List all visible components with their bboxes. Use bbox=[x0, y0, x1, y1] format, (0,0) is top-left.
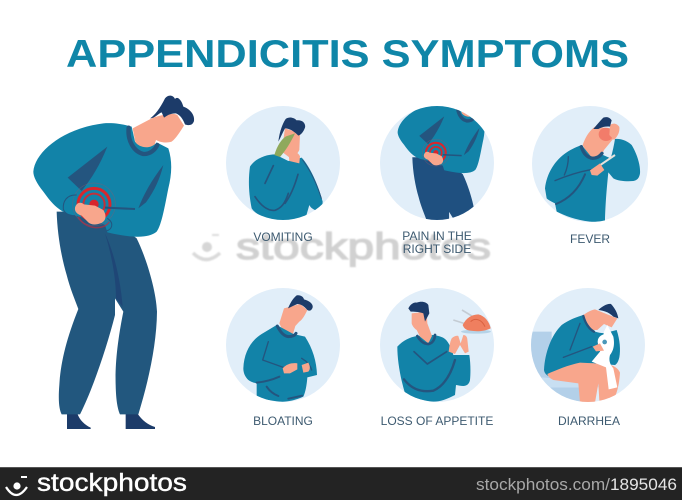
forehead hand bbox=[609, 124, 619, 140]
sweater bbox=[243, 325, 317, 402]
icon: loss of appetite bbox=[380, 288, 494, 402]
trousers bbox=[412, 157, 474, 220]
toilet paper bbox=[592, 325, 617, 389]
hand with thermometer bbox=[590, 163, 604, 176]
watermark bbox=[193, 226, 491, 267]
sweater folds bbox=[68, 147, 107, 191]
head bbox=[583, 309, 617, 330]
main figure: man holding his abdomen bbox=[33, 96, 194, 429]
hair bbox=[598, 304, 618, 318]
hair bbox=[408, 302, 429, 322]
icon: bloating bbox=[226, 288, 340, 402]
collar bbox=[583, 316, 594, 332]
watermark: stockphotos bbox=[236, 226, 491, 267]
head and neck bbox=[583, 127, 615, 159]
folds bbox=[555, 157, 591, 181]
collar bbox=[581, 147, 602, 158]
collar bbox=[128, 128, 157, 154]
turkey bbox=[463, 314, 491, 331]
collar bbox=[417, 335, 435, 344]
vomit bbox=[274, 133, 295, 157]
pain rings bbox=[422, 139, 449, 166]
pain rings bbox=[73, 183, 115, 228]
icon: pain in the right side bbox=[380, 106, 494, 220]
label: fever: FEVER bbox=[570, 232, 610, 246]
footer logo icon bbox=[6, 477, 27, 495]
legs bbox=[547, 363, 620, 403]
folds bbox=[255, 166, 298, 210]
circle background bbox=[531, 288, 645, 402]
hands bbox=[288, 153, 300, 164]
label: bloating: BLOATING bbox=[253, 414, 313, 428]
plate bbox=[461, 330, 491, 334]
folds bbox=[419, 116, 444, 144]
sweater bbox=[249, 154, 323, 221]
title: APPENDICITIS SYMPTOMS bbox=[66, 33, 629, 76]
collar bbox=[277, 326, 296, 337]
icon: vomiting bbox=[226, 106, 340, 221]
thermometer bbox=[599, 155, 615, 166]
circle background bbox=[226, 288, 340, 402]
footer bar bbox=[0, 467, 682, 500]
head and neck bbox=[133, 114, 184, 149]
sweater bbox=[397, 335, 470, 402]
hands bbox=[424, 152, 443, 165]
circle background bbox=[380, 288, 494, 402]
hair bbox=[593, 117, 612, 129]
neck and head bbox=[412, 312, 432, 343]
folds bbox=[414, 352, 447, 364]
hand bbox=[593, 343, 604, 351]
circle background bbox=[380, 106, 494, 220]
footer logo text: stockphotos bbox=[37, 469, 187, 497]
label: pain in the right side bbox=[402, 229, 472, 256]
sweater bbox=[398, 102, 484, 173]
collar bbox=[456, 109, 474, 123]
sweater bbox=[545, 139, 640, 222]
hands bbox=[449, 335, 469, 354]
icon: fever bbox=[532, 106, 648, 222]
toilet seat bbox=[542, 377, 600, 387]
flush bbox=[599, 128, 613, 141]
shoes bbox=[67, 413, 155, 429]
hair bbox=[288, 295, 313, 311]
label: pain in the right side: PAIN IN THE bbox=[402, 229, 472, 243]
belt line bbox=[105, 208, 135, 209]
hands bbox=[283, 363, 310, 373]
head bbox=[283, 128, 300, 157]
neck bbox=[462, 112, 472, 118]
icon: diarrhea bbox=[530, 288, 645, 403]
fold bbox=[563, 323, 592, 357]
toilet base bbox=[550, 388, 580, 402]
trouser fold bbox=[105, 233, 123, 307]
head and neck bbox=[279, 304, 307, 335]
sweater bbox=[544, 315, 620, 376]
arm outlines bbox=[63, 195, 112, 231]
label: loss of appetite: LOSS OF APPETITE bbox=[381, 414, 493, 428]
folds bbox=[263, 342, 312, 370]
label: pain in the right side: RIGHT SIDE bbox=[403, 242, 471, 256]
circle background bbox=[226, 106, 340, 220]
toilet tank bbox=[530, 332, 552, 380]
sweater bbox=[33, 123, 171, 237]
hands bbox=[75, 203, 106, 224]
hair bbox=[150, 96, 194, 125]
trousers bbox=[57, 212, 157, 414]
circle background bbox=[532, 106, 648, 222]
footer url: stockphotos.com/1895046 bbox=[476, 475, 677, 494]
hair bbox=[278, 118, 305, 142]
label: diarrhea: DIARRHEA bbox=[558, 414, 620, 428]
turkey bones bbox=[453, 310, 474, 324]
label: vomiting: VOMITING bbox=[253, 230, 313, 244]
